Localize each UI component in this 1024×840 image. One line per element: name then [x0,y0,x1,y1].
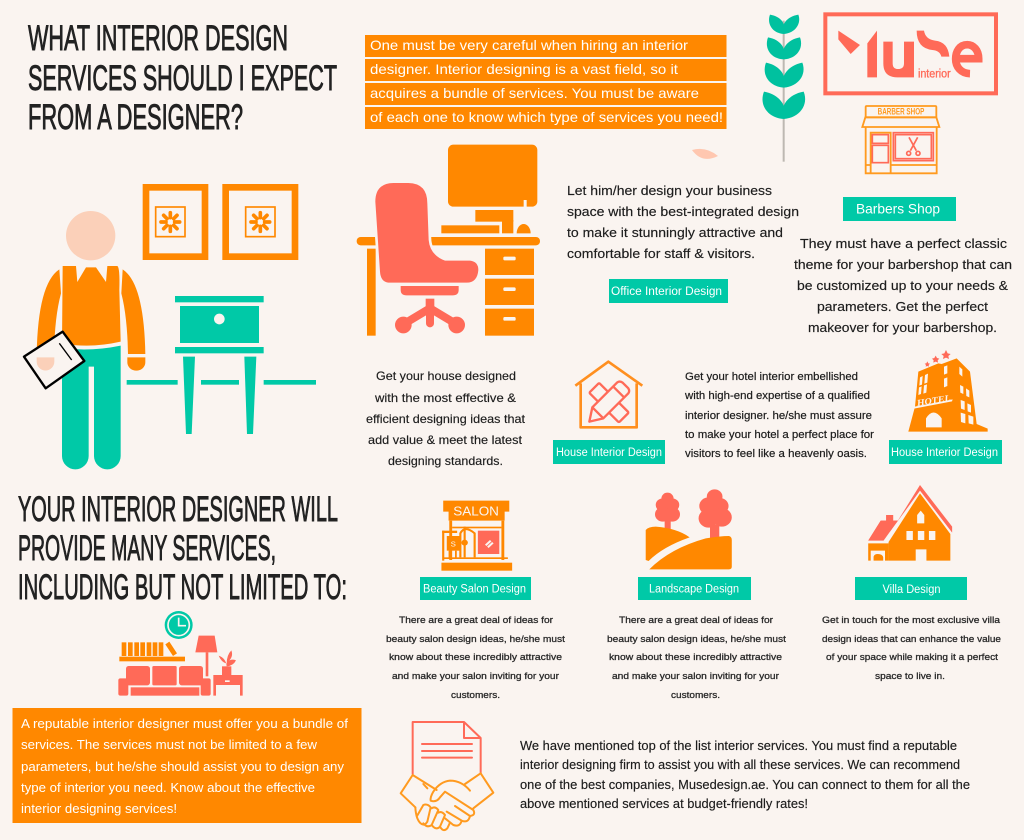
label: Landscape Design [638,577,751,600]
text: house interior: add value & meet the latest [368,433,523,447]
logo: Muse interior [825,14,996,93]
text: hotel interior: interior designer. he/she must assure [685,410,872,422]
text: beauty salon: know about these incredibly attractive [389,652,562,663]
text: conclusion [520,739,970,811]
text: barbers shop [794,237,1012,335]
icon: landscape [646,489,732,569]
icon: salon: S [451,540,456,549]
icon: office desk and chair [357,145,540,336]
label: House Interior Design [553,440,665,464]
text: landscape: and make your salon inviting for your [612,671,780,682]
label: Barbers Shop: Barbers Shop [856,200,940,216]
figure: designer [24,211,145,469]
text: villa: space to live in. [875,671,945,682]
text: hotel interior: Get your hotel interior embellished [685,371,858,383]
text: landscape [607,615,786,701]
text: landscape: beauty salon design ideas, he/she must [607,634,786,645]
heading: services: INCLUDING BUT NOT LIMITED TO: [18,567,347,607]
icon: hotel: HOTEL [915,393,952,408]
icon: picture frames [146,187,295,257]
text: beauty salon [386,615,565,701]
text: office: Let him/her design your business [567,184,772,198]
heading: services [18,489,347,607]
callout: services summary: A reputable interior designer must offer you a bundle of [21,717,349,731]
intro callout: designer. Interior designing is a vast field, so it [370,61,678,77]
heading: services: PROVIDE MANY SERVICES, [18,528,276,568]
callout: services summary: interior designing services! [21,802,177,816]
text: conclusion: one of the best companies, Musedesign.ae. You can connect to them for all the [520,778,970,792]
label: Office Interior Design [609,279,728,303]
text: barbers shop: They must have a perfect classic [800,237,1008,251]
text: barbers shop: theme for your barbershop that can [794,258,1012,272]
callout: services summary: services. The services must not be limited to a few [21,738,318,752]
text: barbers shop: makeover for your barbershop. [808,321,997,335]
text: beauty salon: There are a great deal of ideas for [399,615,554,626]
petal [692,149,718,159]
text: house interior [366,369,526,468]
text: landscape: customers. [671,690,720,701]
callout: services summary: parameters, but he/she should assist you to design any [21,760,345,774]
text: hotel interior: with high-end expertise of a qualified [684,390,870,402]
label: House Interior Design (hotel) [889,440,1002,464]
text: beauty salon: and make your salon inviting for your [392,671,560,682]
intro callout: acquires a bundle of services. You must be aware [370,85,699,101]
text: house interior: efficient designing ideas that [366,412,526,426]
icon: hotel [908,350,988,432]
intro callout: of each one to know which type of services you need! [370,109,723,125]
text: house interior: with the most effective & [374,391,516,405]
title: WHAT INTERIOR DESIGN [28,18,288,58]
icon: barber shop: BARBER SHOP [878,107,924,117]
label: Landscape Design: Landscape Design [649,584,739,596]
icon: side table [127,296,316,434]
title [28,18,337,137]
icon: villa [868,485,952,561]
text: office: comfortable for staff & visitors. [567,247,755,261]
title: SERVICES SHOULD I EXPECT [28,58,337,98]
heading: services: YOUR INTERIOR DESIGNER WILL [18,489,338,529]
text: beauty salon: customers. [451,690,500,701]
intro callout: One must be very careful when hiring an interior [370,37,688,53]
label: Beauty Salon Design: Beauty Salon Design [423,584,526,596]
text: barbers shop: be customized up to your needs & [797,279,1009,293]
icon: plant [762,15,805,162]
label: Villa Design: Villa Design [882,584,940,596]
label: Office Interior Design: Office Interior Design [611,286,722,298]
text: barbers shop: parameters. Get the perfect [817,300,989,314]
text: beauty salon: beauty salon design ideas, he/she must [386,634,565,645]
icon: salon [441,501,512,571]
text: office: to make it stunningly attractive and [567,226,783,240]
icon: salon: SALON [453,504,499,518]
text: villa: design ideas that can enhance the value [822,634,1001,645]
label: House Interior Design (hotel): House Interior Design [891,447,998,459]
icon: contract and handshake [401,722,493,830]
text: villa: of your space while making it a perfect [826,652,998,663]
label: Barbers Shop [843,197,956,221]
icon: sofa and living room [118,611,243,696]
text: office: space with the best-integrated design [567,205,799,219]
text: office [567,184,799,261]
label: Villa Design [855,577,967,600]
text: conclusion: We have mentioned top of the list interior services. You must find a reputable [520,739,957,753]
callout: services summary: type of interior you need. Know about the effective [21,781,315,795]
intro callout [365,35,726,129]
text: villa [822,615,1001,682]
callout: services summary [12,708,362,823]
logo: Muse interior: interior [918,66,951,80]
text: villa: Get in touch for the most exclusive villa [822,615,1001,626]
text: landscape: know about these incredibly attractive [609,652,782,663]
title: FROM A DESIGNER? [28,97,243,137]
label: Beauty Salon Design [420,577,531,600]
text: hotel interior [684,371,874,460]
text: landscape: There are a great deal of ideas for [619,615,774,626]
icon: house with ruler and pencil [575,362,642,427]
text: hotel interior: to make your hotel a perfect place for [685,429,874,441]
text: house interior: designing standards. [388,454,503,468]
text: conclusion: above mentioned services at budget-friendly rates! [520,797,808,811]
illustration: designer with frames and table [24,187,316,469]
label: House Interior Design: House Interior Design [556,447,662,459]
text: conclusion: interior designing firm to assist you with all these services. We can recommend [520,758,960,772]
text: house interior: Get your house designed [376,369,516,383]
icon: barber shop [862,106,939,173]
text: hotel interior: visitors to feel like a heavenly oasis. [685,448,867,460]
